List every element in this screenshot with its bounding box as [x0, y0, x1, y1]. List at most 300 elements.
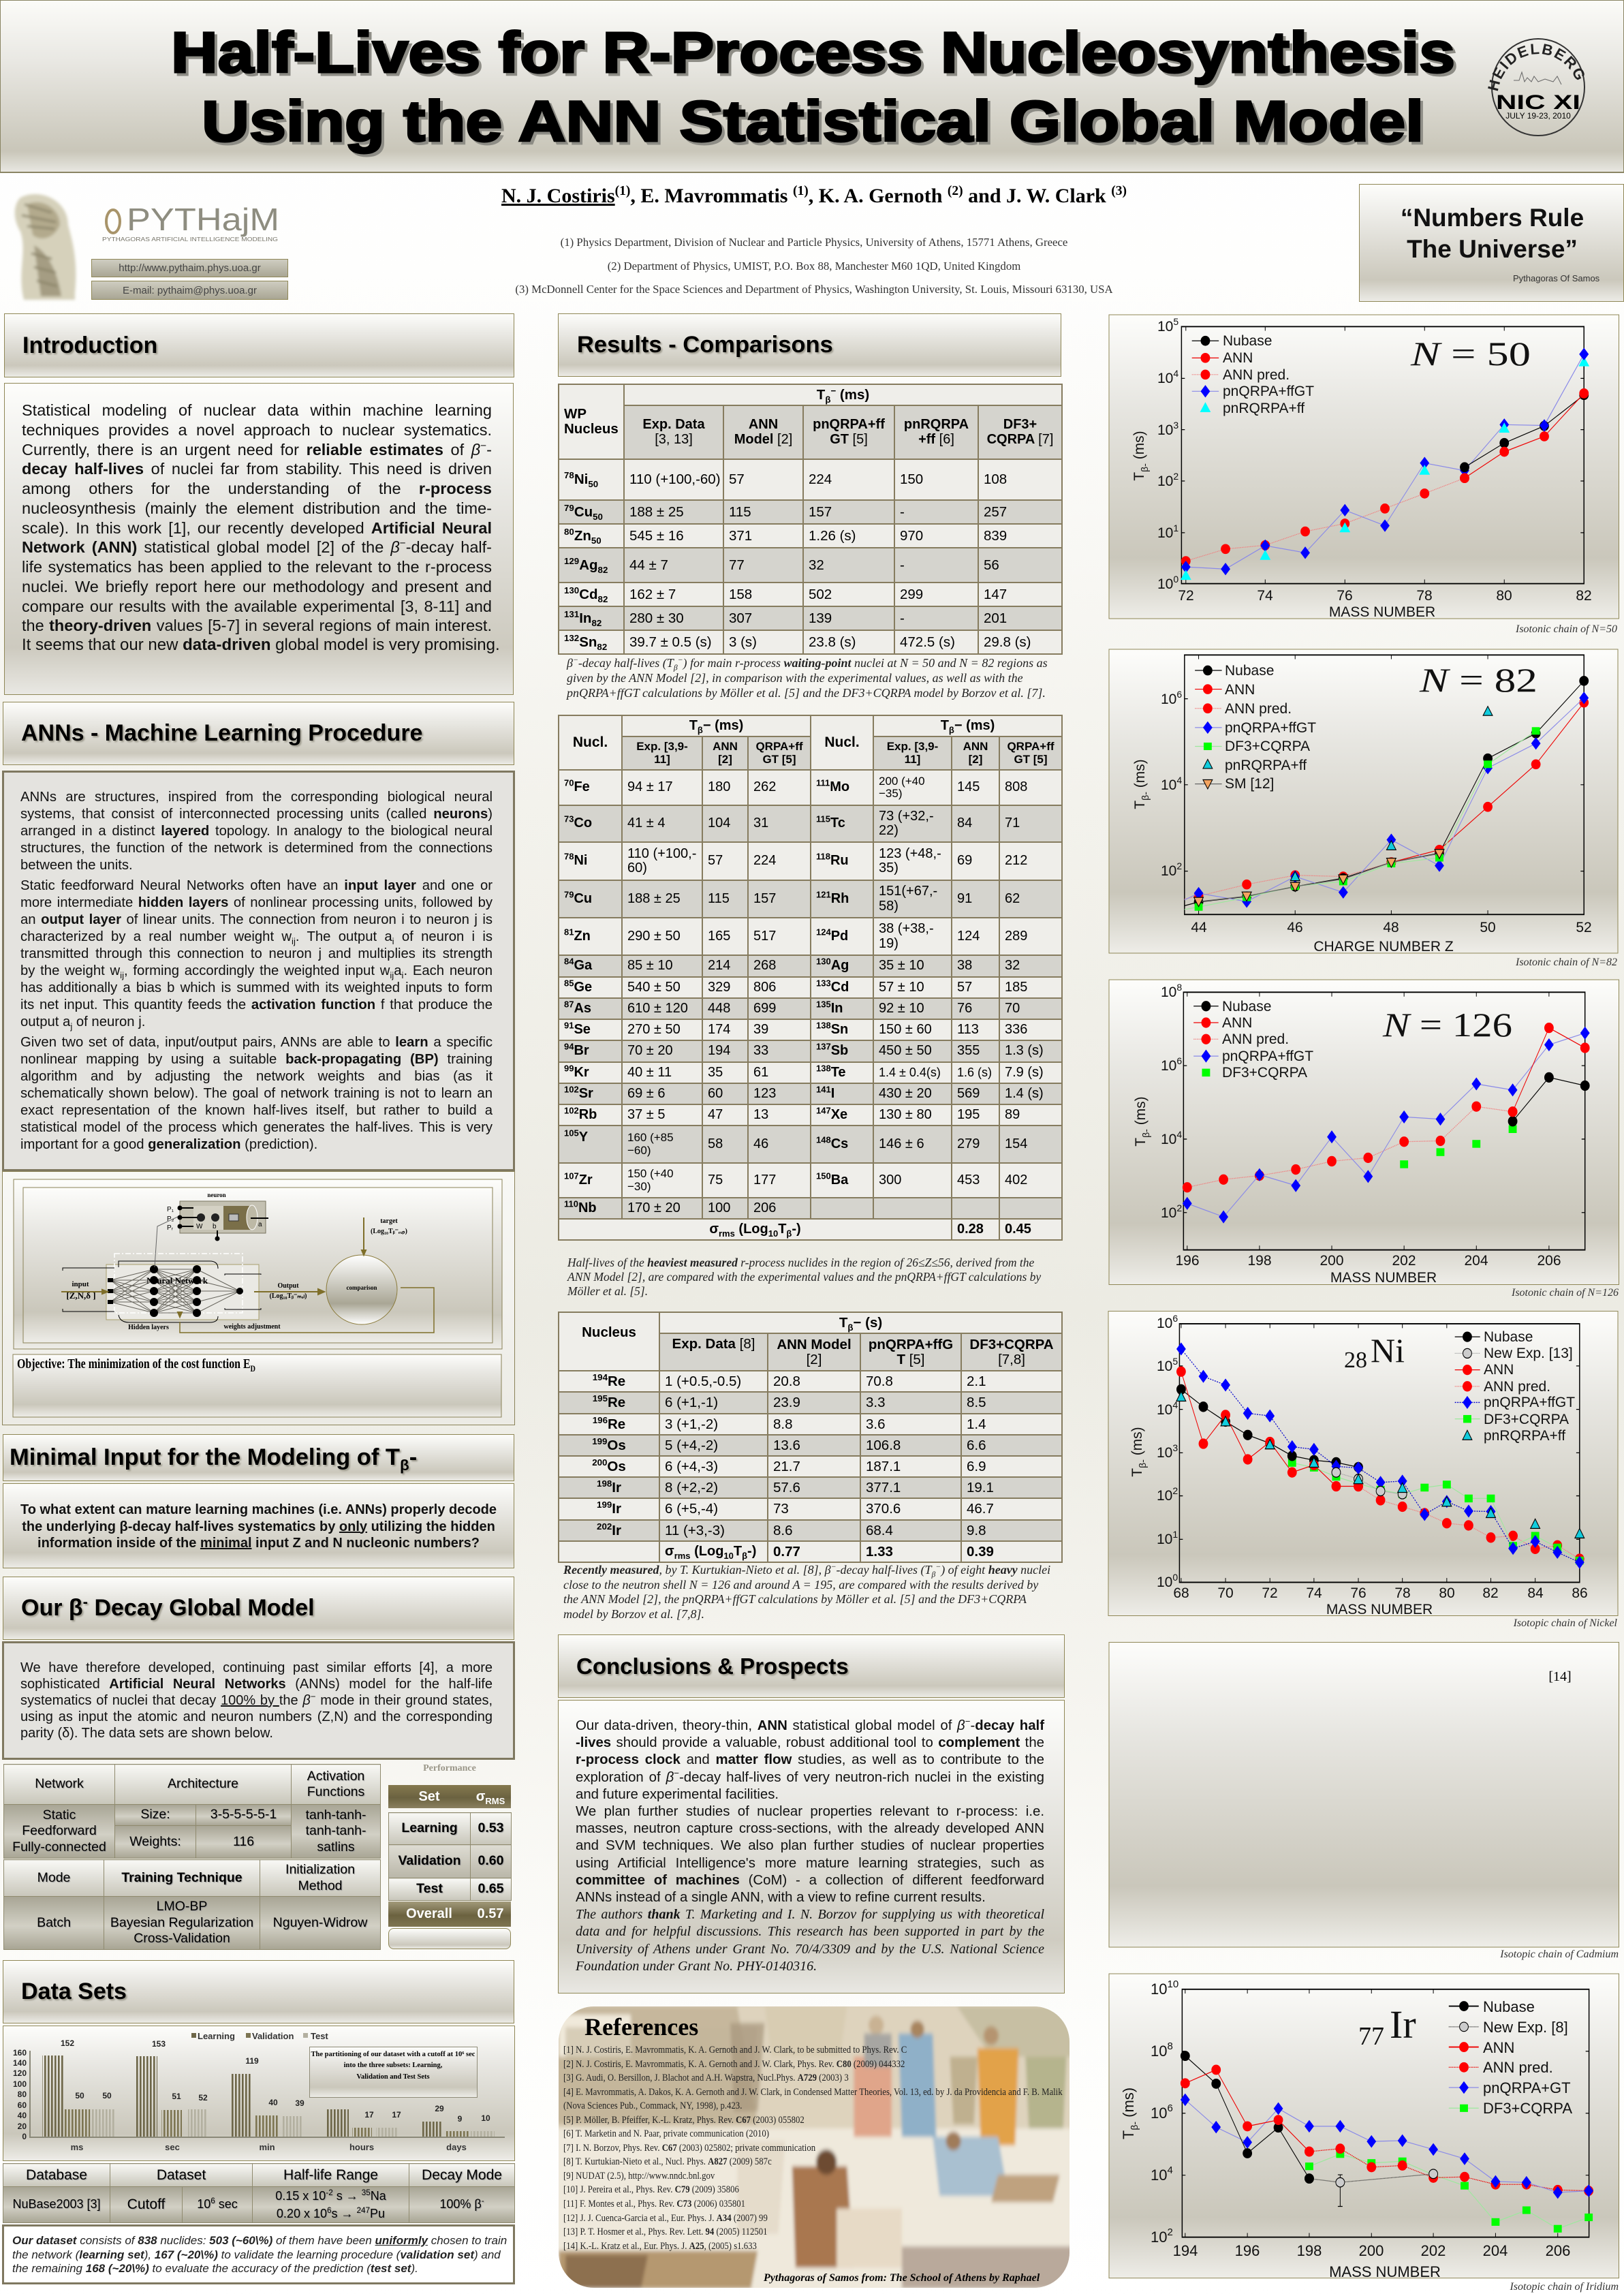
table: network architecture: tanh-tanh-tanh-tanh-satlins	[306, 1808, 366, 1855]
table: heaviest measured nuclides: 212	[1005, 853, 1027, 868]
table: waiting-point nuclei: 3 (s)	[729, 634, 757, 650]
panel: global model text: systematics of nuclei that decay 100% by the β− mode in their ground states,	[20, 1691, 493, 1708]
chart: N = 126: 10	[1161, 1132, 1176, 1147]
table: heaviest measured nuclides: 150Ba	[816, 1170, 848, 1188]
chart: iridium isotopes: 206	[1546, 2242, 1570, 2259]
panel: ANN description text: Static feedforward Neural Networks often have an input layer and one or	[20, 878, 493, 893]
chart: N = 82: 6	[1176, 689, 1182, 700]
table: performance values	[388, 1812, 512, 1901]
table: database: NuBase2003 [3]	[12, 2197, 101, 2211]
table: waiting-point nuclei: 57	[729, 471, 745, 487]
table: waiting-point nuclei: 147	[984, 587, 1007, 602]
table: N=126 heavy nuclei: [2]	[807, 1352, 822, 1367]
panel: ANN description text: an output layer of linear units. The connection from neuron i to neuron j is	[20, 912, 493, 927]
table: N=126 heavy nuclei: Tβ− (s)	[839, 1315, 882, 1333]
chart axes: 100	[13, 2079, 27, 2089]
panel: data set bar chart	[3, 2026, 515, 2161]
table: heaviest measured nuclides: [2]	[969, 752, 982, 766]
table: heaviest measured nuclides: GT [5]	[762, 752, 796, 766]
chart: N = 50: 4	[1173, 368, 1178, 379]
table: waiting-point nuclei: 139	[809, 610, 832, 626]
caption: waiting-point table: given by the ANN Model [2], in comparison with the experimental values, as well as with the	[567, 671, 1023, 685]
panel: ANN description text: has additionally a bias b which is summed with its weighted inputs to form	[20, 980, 493, 995]
table: N=126 heavy nuclei: Nucleus	[582, 1324, 636, 1340]
table: N=126 heavy nuclei: T [5]	[896, 1352, 925, 1367]
panel: introduction text: decay half-lives of nuclei far from stability. This need is driven	[22, 460, 492, 478]
chart: nickel isotopes: DF3+CQRPA	[1484, 1412, 1569, 1427]
panel: dataset description: the remaining 168 (~20\%) to evaluate the accuracy of the prediction (test set).	[12, 2262, 418, 2275]
chart: nickel isotopes: 0	[1172, 1572, 1178, 1583]
chart: N = 126: β-	[1140, 1129, 1151, 1138]
table: waiting-point nuclei: -	[900, 504, 905, 520]
table: database: Cutoff	[127, 2197, 165, 2212]
table: heaviest measured nuclides: 62	[1005, 891, 1020, 906]
table: network architecture: Weights:	[129, 1834, 181, 1849]
table: heaviest measured nuclides: 85Ge	[564, 978, 592, 995]
chart: N = 50: pnQRPA+ffGT	[1223, 384, 1314, 399]
table: network architecture: Network	[35, 1776, 84, 1791]
chart: iridium isotopes: 6	[1167, 2103, 1173, 2114]
table: heaviest measured nuclides: 130 ± 80	[879, 1107, 932, 1122]
panel: ANN description text: characterized by a real number weight wij. The output ai of neuron i is	[20, 929, 493, 946]
chart: N = 126: ANN	[1222, 1015, 1252, 1031]
table: database: Database	[26, 2167, 87, 2183]
table: waiting-point nuclei: 115	[729, 504, 751, 520]
chart: N = 82: 52	[1576, 920, 1592, 935]
chart: N = 50: 10	[1157, 576, 1173, 592]
table: heaviest measured nuclides: 450 ± 50	[879, 1043, 932, 1058]
network schematic: Hidden layers	[128, 1324, 169, 1331]
chart: N = 50: 78	[1416, 588, 1433, 604]
table: heaviest measured nuclides: 91Se	[564, 1020, 591, 1037]
chart: nickel isotopes: 10	[1157, 1445, 1172, 1461]
heading: Minimal input: Minimal Input for the Modeling of Tβ-	[10, 1444, 417, 1474]
panel: introduction text: nuclei. We briefly report here our methodology and present and	[22, 578, 492, 595]
table: heaviest measured nuclides: 70	[1005, 1001, 1020, 1016]
table: heaviest measured nuclides: 194	[708, 1043, 730, 1058]
panel: dataset description: the network (learning set), 167 (~20\%) to validate the learning procedure (validation set) and	[12, 2248, 501, 2261]
panel: conclusions text	[558, 1700, 1065, 1994]
table: heaviest measured nuclides	[558, 715, 1063, 1241]
panel: ANN description text: schematically shown below). The goal of network training is not to learn an	[20, 1086, 493, 1101]
panel: introduction text: nucleosynthesis (mainly the element distribution and the time-	[22, 499, 492, 517]
table: network architecture: Activation Functions	[307, 1769, 364, 1799]
panel: research question: To what extent can mature learning machines (i.e. ANNs) properly decode	[20, 1502, 497, 1517]
table: heaviest measured nuclides: 0.45	[1005, 1222, 1031, 1237]
chart: nickel isotopes: 4	[1172, 1399, 1178, 1410]
table: network architecture: Architecture	[168, 1776, 238, 1791]
table: heaviest measured nuclides: 84	[957, 816, 972, 831]
table: waiting-point nuclei: pnRQRPA	[904, 417, 969, 432]
table: heaviest measured nuclides: −60)	[627, 1143, 651, 1157]
table: heaviest measured nuclides: 355	[957, 1043, 980, 1058]
references title: References	[584, 2013, 698, 2041]
panel: conclusions text: and future experimental facilities.	[576, 1787, 779, 1802]
chart legend	[191, 2031, 328, 2041]
table: heaviest measured nuclides: 121Rh	[816, 889, 849, 906]
table: N=126 heavy nuclei: 70.8	[866, 1374, 893, 1389]
caption: cadmium: Isotopic chain of Cadmium	[1499, 1949, 1619, 1960]
quote box	[1359, 184, 1624, 302]
panel: conclusions text: and SVM techniques. We also plan further studies of nuclear properties	[576, 1838, 1044, 1853]
table: training technique: Training Technique	[121, 1870, 243, 1885]
painting credit: Pythagoras of Samos from: The School of Athens by Raphael	[764, 2272, 1040, 2284]
chart: N = 126: 202	[1392, 1253, 1416, 1269]
painting: School of Athens backdrop	[559, 2006, 1069, 2288]
table: heaviest measured nuclides: ANN	[963, 740, 988, 753]
caption: N=82: Isotonic chain of N=82	[1515, 957, 1617, 968]
references list: [12] J. J. Cuenca-Garcia et al., Eur. Phys. J. A34 (2007) 99	[563, 2213, 768, 2224]
chart: N = 82: 48	[1383, 920, 1399, 935]
table: database: 106 sec	[197, 2197, 238, 2211]
chart: iridium isotopes: 196	[1235, 2242, 1260, 2259]
chart: N = 126: 204	[1464, 1253, 1488, 1269]
table: heaviest measured nuclides: 270 ± 50	[627, 1022, 681, 1037]
table: training technique: Nguyen-Widrow	[273, 1915, 367, 1930]
table: heaviest measured nuclides: 84Ga	[564, 957, 592, 973]
heading: conclusions	[558, 1634, 1065, 1698]
references list: (Nova Sciences Pub., Commack, NY, 1998), p.423.	[563, 2100, 742, 2111]
affiliations: (3) McDonnell Center for the Space Sciences and Department of Physics, Washington University, St. Louis, Missouri 63130, USA	[515, 283, 1113, 296]
table: heaviest measured nuclides: 1.6 (s)	[957, 1066, 992, 1079]
bar value labels: 50	[75, 2091, 84, 2100]
chart: iridium isotopes: Ir	[1390, 2002, 1416, 2047]
table: waiting-point nuclei: Model [2]	[734, 432, 792, 447]
chart: N = 50: 72	[1178, 588, 1194, 604]
chart: N = 50: 10	[1157, 474, 1173, 489]
chart axes: 80	[18, 2090, 27, 2099]
table: training technique: Cross-Validation	[134, 1931, 230, 1946]
panel: conclusions text: -lives should provide a valuable, robust additional tool to complement the	[576, 1735, 1044, 1750]
table: heaviest measured nuclides: 806	[753, 980, 776, 995]
chart: N = 82: SM [12]	[1225, 776, 1274, 792]
table: heaviest measured nuclides: 138Te	[816, 1063, 846, 1080]
table: heaviest measured nuclides: 137Sb	[816, 1042, 848, 1058]
table: N=126 heavy nuclei: 8.8	[773, 1416, 793, 1432]
chart: iridium isotopes: 10	[1151, 1981, 1167, 1998]
table: heaviest measured nuclides: 69 ± 6	[627, 1086, 665, 1101]
table: heaviest measured nuclides: 214	[708, 958, 730, 973]
table: heaviest measured nuclides: 73 (+32,-	[879, 809, 934, 824]
chart: iridium isotopes: 200	[1359, 2242, 1384, 2259]
icon: conference seal NIC XI	[1488, 38, 1585, 136]
table: waiting-point nuclei: 970	[900, 528, 923, 544]
panel: ANN description text: its net input. This quantity feeds the activation function f that produce the	[20, 997, 493, 1012]
table: heaviest measured nuclides: QRPA+ff	[1007, 740, 1055, 753]
table: heaviest measured nuclides: 70 ± 20	[627, 1043, 673, 1058]
table: waiting-point nuclei: WP Nucleus	[564, 406, 619, 437]
link button: email: E-mail: pythaim@phys.uoa.gr	[123, 285, 257, 296]
chart axes: 60	[18, 2100, 27, 2110]
table: N=126 heavy nuclei: 0.77	[773, 1544, 800, 1560]
chart: iridium isotopes: New Exp. [8]	[1483, 2019, 1568, 2036]
caption: waiting-point table: pnQRPA+ffGT calculations by Möller et al. [5] and the DF3+CQRPA model by Borzov et al. [7].	[567, 686, 1046, 700]
neuron detail	[167, 1192, 268, 1241]
chart: iridium isotopes: 77	[1358, 2022, 1384, 2051]
table: heaviest measured nuclides: 448	[708, 1001, 730, 1016]
heading: global model: Our β- Decay Global Model	[21, 1594, 315, 1621]
table: waiting-point nuclei: 162 ± 7	[629, 587, 676, 602]
caption: heavy nuclei table: close to the neutron shell N = 126 and around A = 195, are compared with the results derived by	[563, 1578, 1038, 1592]
table: N=126 heavy nuclei: 3.3	[866, 1395, 886, 1410]
panel: conclusions text: ANNs instead of a single ANN, with a view to refine current results.	[576, 1890, 986, 1905]
chart: nickel isotopes: T	[1129, 1468, 1145, 1477]
references list: [5] P. Möller, B. Pfeiffer, K.-L. Kratz, Phys. Rev. C67 (2003) 055802	[563, 2115, 805, 2126]
heading: data sets: Data Sets	[21, 1979, 127, 2004]
chart: nickel isotopes: 10	[1157, 1316, 1172, 1331]
table: heaviest measured nuclides: Nucl.	[573, 734, 608, 750]
table: network architecture: Static Feedforward Fully-connected	[12, 1808, 106, 1855]
table: heaviest measured nuclides: 104	[708, 816, 730, 831]
chart: N = 82: β-	[1140, 792, 1151, 801]
chart: N = 126: 8	[1176, 982, 1182, 993]
chart: iridium isotopes: 4	[1167, 2165, 1173, 2176]
panel: ANN description text: more intermediate hidden layers of nonlinear processing units, followed by	[20, 895, 493, 910]
table: waiting-point nuclei: 201	[984, 610, 1007, 626]
table: heaviest measured nuclides: 147Xe	[816, 1105, 847, 1122]
chart: nickel isotopes: 68	[1173, 1585, 1189, 1601]
table: N=126 heavy nuclei: 196Re	[593, 1415, 625, 1432]
panel: ANN description text: between the units.	[20, 858, 133, 873]
table: heaviest measured nuclides: 1.4 ± 0.4(s)	[879, 1066, 941, 1079]
table: training technique: Initialization Method	[285, 1862, 355, 1893]
table: waiting-point nuclei: 224	[809, 471, 832, 487]
table: heaviest measured nuclides: 224	[753, 853, 776, 868]
table: waiting-point nuclei: 79Cu50	[564, 503, 603, 522]
table: heaviest measured nuclides: 1.3 (s)	[1005, 1043, 1044, 1058]
link button: website: http://www.pythaim.phys.uoa.gr	[119, 262, 261, 274]
panel: neural network diagram and objective	[2, 1171, 515, 1425]
chart: iridium isotopes: 10	[1151, 2167, 1167, 2184]
panel: references over School of Athens	[559, 2006, 1069, 2288]
category labels: hours	[349, 2142, 374, 2152]
panel: introduction text: compare our results with the available experimental [3, 8-11] and	[22, 597, 492, 615]
chart: N = 50: ANN	[1223, 350, 1253, 366]
table: heaviest measured nuclides: 124Pd	[816, 927, 848, 944]
panel: conclusions text: Our data-driven, theory-thin, ANN statistical global model of β−-decay half	[576, 1716, 1044, 1733]
table: heaviest measured nuclides: 71	[1005, 816, 1020, 831]
table: heaviest measured nuclides: 58)	[879, 898, 899, 913]
chart: N = 82: 2	[1176, 860, 1182, 871]
table: training technique: Bayesian Regularization	[110, 1915, 253, 1930]
table: network architecture: Size:	[140, 1807, 170, 1822]
table: heaviest measured nuclides: 150 ± 60	[879, 1022, 932, 1037]
table: heaviest measured nuclides: QRPA+ff	[755, 740, 803, 753]
neuron detail: P₁	[167, 1206, 174, 1213]
table: N=126 heavy nuclei: 6 (+1,-1)	[665, 1395, 718, 1410]
bar value labels: 39	[295, 2098, 304, 2108]
table: heaviest measured nuclides: 76	[957, 1001, 972, 1016]
chart: iridium isotopes: 204	[1483, 2242, 1508, 2259]
table: heaviest measured nuclides: 195	[957, 1107, 980, 1122]
table: heaviest measured nuclides: 91	[957, 891, 972, 906]
table: performance values: 0.53	[478, 1820, 503, 1835]
table: heaviest measured nuclides: 37 ± 5	[627, 1107, 665, 1122]
chart: N = 126: 6	[1176, 1055, 1182, 1066]
chart: N = 126: pnQRPA+ffGT	[1222, 1049, 1313, 1064]
quote box: The Universe”	[1407, 235, 1578, 263]
chart: N = 50: 10	[1157, 525, 1173, 541]
panel: conclusions text: exploration of β−-decay half-lives of very neutron-rich nuclei in the existing	[576, 1768, 1044, 1785]
neuron detail: a	[258, 1221, 262, 1228]
table: waiting-point nuclei: 307	[729, 610, 752, 626]
table: waiting-point nuclei: 32	[809, 557, 824, 573]
table: heaviest measured nuclides: 35 ± 10	[879, 958, 924, 973]
row: overall performance: 0.57	[478, 1906, 503, 1921]
chart: N = 50: 10	[1157, 422, 1173, 438]
panel: ANN description text: systems, that consist of interconnected processing units (called neurons)	[20, 807, 493, 822]
chart: iridium isotopes: 10	[1151, 2229, 1167, 2246]
table: N=126 heavy nuclei: 46.7	[967, 1501, 994, 1517]
table: heaviest measured nuclides: Tβ− (ms)	[689, 718, 743, 735]
chart: iridium isotopes: DF3+CQRPA	[1483, 2100, 1572, 2117]
table: heaviest measured nuclides: 32	[1005, 958, 1020, 973]
chart: N = 50: 3	[1173, 420, 1178, 431]
network schematic: (Log₁₀Tᵦ⁻ₘₒₗ)	[270, 1292, 307, 1300]
chart: iridium isotopes: 8	[1167, 2041, 1173, 2052]
panel: ANN description text: arranged in a distinct layered topology. In analogy to the biological neural	[20, 824, 493, 839]
table: heaviest measured nuclides: 610 ± 120	[627, 1001, 688, 1016]
table: waiting-point nuclei: -	[900, 610, 905, 626]
table: N=126 heavy nuclei	[558, 1312, 1063, 1563]
bar value labels: 9	[458, 2114, 463, 2124]
table: heaviest measured nuclides: 110 (+100,-	[627, 846, 696, 861]
table: heaviest measured nuclides: 262	[753, 779, 776, 794]
chart: N = 126	[1109, 980, 1619, 1286]
table: heaviest measured nuclides: 47	[708, 1107, 723, 1122]
chart: nickel isotopes: 78	[1394, 1585, 1411, 1601]
chart note: into the three subsets: Learning,	[344, 2062, 443, 2069]
table: performance set header: Set	[418, 1789, 440, 1804]
objective box	[13, 1354, 501, 1417]
category labels: sec	[165, 2142, 180, 2152]
references list: [13] P. T. Hosmer et al., Phys. Rev. Lett. 94 (2005) 112501	[563, 2227, 767, 2237]
row: overall performance	[388, 1902, 511, 1927]
chart: N = 126: 10	[1161, 1058, 1176, 1074]
panel: introduction text: It seems that our new data-driven global model is very promising.	[22, 636, 500, 654]
table: N=126 heavy nuclei: 0.39	[967, 1544, 994, 1560]
table: waiting-point nuclei: 150	[900, 471, 923, 487]
table: heaviest measured nuclides: 61	[753, 1065, 768, 1080]
table: N=126 heavy nuclei: 23.9	[773, 1395, 800, 1410]
chart: nickel isotopes: MASS NUMBER	[1326, 1602, 1433, 1617]
table: waiting-point nuclei: [3, 13]	[655, 432, 693, 447]
chart: N = 82: DF3+CQRPA	[1225, 739, 1310, 754]
heading: Introduction	[4, 313, 514, 377]
authors: N. J. Costiris(1), E. Mavrommatis (1), K. A. Gernoth (2) and J. W. Clark (3)	[501, 184, 1127, 207]
chart: N = 50: 10	[1157, 371, 1173, 386]
table: network architecture: 3-5-5-5-5-1	[210, 1807, 277, 1822]
chart legend: Learning	[198, 2031, 235, 2041]
table: heaviest measured nuclides: 57 ± 10	[879, 980, 924, 995]
table: heaviest measured nuclides: 78Ni	[564, 852, 587, 868]
title	[171, 20, 1456, 157]
table: heaviest measured nuclides: 170 ± 20	[627, 1200, 681, 1215]
table: heaviest measured nuclides: 188 ± 25	[627, 891, 681, 906]
chart: iridium isotopes: pnQRPA+GT	[1483, 2079, 1571, 2096]
table: network architecture: 116	[233, 1834, 254, 1849]
chart: N = 126: Nubase	[1222, 999, 1271, 1014]
chart: N = 82: 44	[1191, 920, 1207, 935]
panel: conclusions text: The authors thank T. Marketing and I. N. Borzov for supplying us with theoretical	[576, 1907, 1044, 1922]
bar value labels: 119	[245, 2056, 259, 2066]
neuron detail: P₂	[167, 1215, 174, 1223]
panel: ANN description text: ANNs are structures, inspired from the corresponding biological neural	[20, 790, 493, 805]
table: heaviest measured nuclides: 200 (+40	[879, 775, 925, 788]
bar value labels: 10	[481, 2113, 490, 2123]
table: heaviest measured nuclides: 160 (+85	[627, 1131, 674, 1144]
table: waiting-point nuclei: 78Ni50	[564, 470, 598, 489]
table: heaviest measured nuclides: 145	[957, 779, 980, 794]
table: waiting-point nuclei: 280 ± 30	[629, 610, 684, 626]
table: N=126 heavy nuclei: 2.1	[967, 1374, 986, 1389]
references list: [10] J. Pereira et al., Phys. Rev. C79 (2009) 35806	[563, 2184, 739, 2195]
table: heaviest measured nuclides: 40 ± 11	[627, 1065, 672, 1080]
caption: N=126: Isotonic chain of N=126	[1511, 1287, 1619, 1299]
table: training technique: Batch	[37, 1915, 71, 1930]
chart: iridium isotopes: 10	[1151, 2105, 1167, 2122]
table: heaviest measured nuclides: 148Cs	[816, 1134, 848, 1151]
table: waiting-point nuclei: pnQRPA+ff	[813, 417, 885, 432]
table: performance values: Test	[416, 1881, 443, 1896]
table: heaviest measured nuclides: 102Rb	[564, 1105, 597, 1122]
heading: conclusions: Conclusions & Prospects	[576, 1653, 849, 1679]
chart: nickel isotopes: 76	[1350, 1585, 1367, 1601]
table: waiting-point nuclei: 299	[900, 587, 923, 602]
table: N=126 heavy nuclei: 8.6	[773, 1523, 793, 1538]
table: N=126 heavy nuclei: 1.33	[866, 1544, 893, 1560]
table: performance set header	[388, 1785, 511, 1808]
table: heaviest measured nuclides: 540 ± 50	[627, 980, 681, 995]
chart note: The partitioning of our dataset with a cutoff at 10⁶ sec	[311, 2051, 475, 2058]
table: heaviest measured nuclides: 289	[1005, 929, 1027, 944]
chart: nickel isotopes: 86	[1572, 1585, 1588, 1601]
chart axes	[13, 2048, 505, 2141]
table: heaviest measured nuclides: 157	[753, 891, 776, 906]
table: heaviest measured nuclides: 115Tc	[816, 814, 845, 831]
chart: N = 126: MASS NUMBER	[1330, 1270, 1437, 1286]
chart: nickel isotopes: Ni	[1371, 1331, 1405, 1369]
table: heaviest measured nuclides: 85 ± 10	[627, 958, 673, 973]
table: waiting-point nuclei: 472.5 (s)	[900, 634, 955, 650]
table: waiting-point nuclei: 29.8 (s)	[984, 634, 1031, 650]
table: N=126 heavy nuclei: 3.6	[866, 1416, 886, 1432]
chart: nickel isotopes: 2	[1172, 1485, 1178, 1496]
network schematic: weights adjustment	[223, 1323, 281, 1331]
table: heaviest measured nuclides: 79Cu	[564, 889, 592, 906]
panel: conclusions text: University of Athens under Grant No. 70/4/3309 and by the U.S. National Science	[576, 1942, 1044, 1957]
title: Half-Lives for R-Process Nucleosynthesis	[171, 20, 1455, 84]
network schematic	[14, 1179, 502, 1349]
table: heaviest measured nuclides: Tβ− (ms)	[941, 718, 995, 735]
category labels: ms	[71, 2142, 83, 2152]
panel: conclusions text: Foundation under Grant No. PHY-0140316.	[576, 1959, 817, 1974]
bar value labels: 152	[61, 2038, 74, 2048]
table: waiting-point nuclei: 545 ± 16	[629, 528, 684, 544]
table: performance values: Learning	[401, 1820, 458, 1835]
table: performance values: Validation	[398, 1853, 461, 1868]
table: heaviest measured nuclides: 57	[708, 853, 723, 868]
chart: nickel isotopes: 80	[1439, 1585, 1455, 1601]
heading: ANNs machine learning procedure: ANNs - Machine Learning Procedure	[21, 720, 422, 746]
chart: N = 50: 1	[1173, 523, 1178, 533]
table: heaviest measured nuclides: 336	[1005, 1022, 1027, 1037]
table: heaviest measured nuclides: 39	[753, 1022, 768, 1037]
panel: ANN description text: Given two set of data, input/output pairs, ANNs are able to learn a specific	[20, 1035, 493, 1050]
table: heaviest measured nuclides: 123	[753, 1086, 776, 1101]
references list: [9] NUDAT (2.5), http://www.nndc.bnl.gov	[563, 2171, 715, 2182]
chart: N = 126: (ms)	[1133, 1096, 1149, 1129]
